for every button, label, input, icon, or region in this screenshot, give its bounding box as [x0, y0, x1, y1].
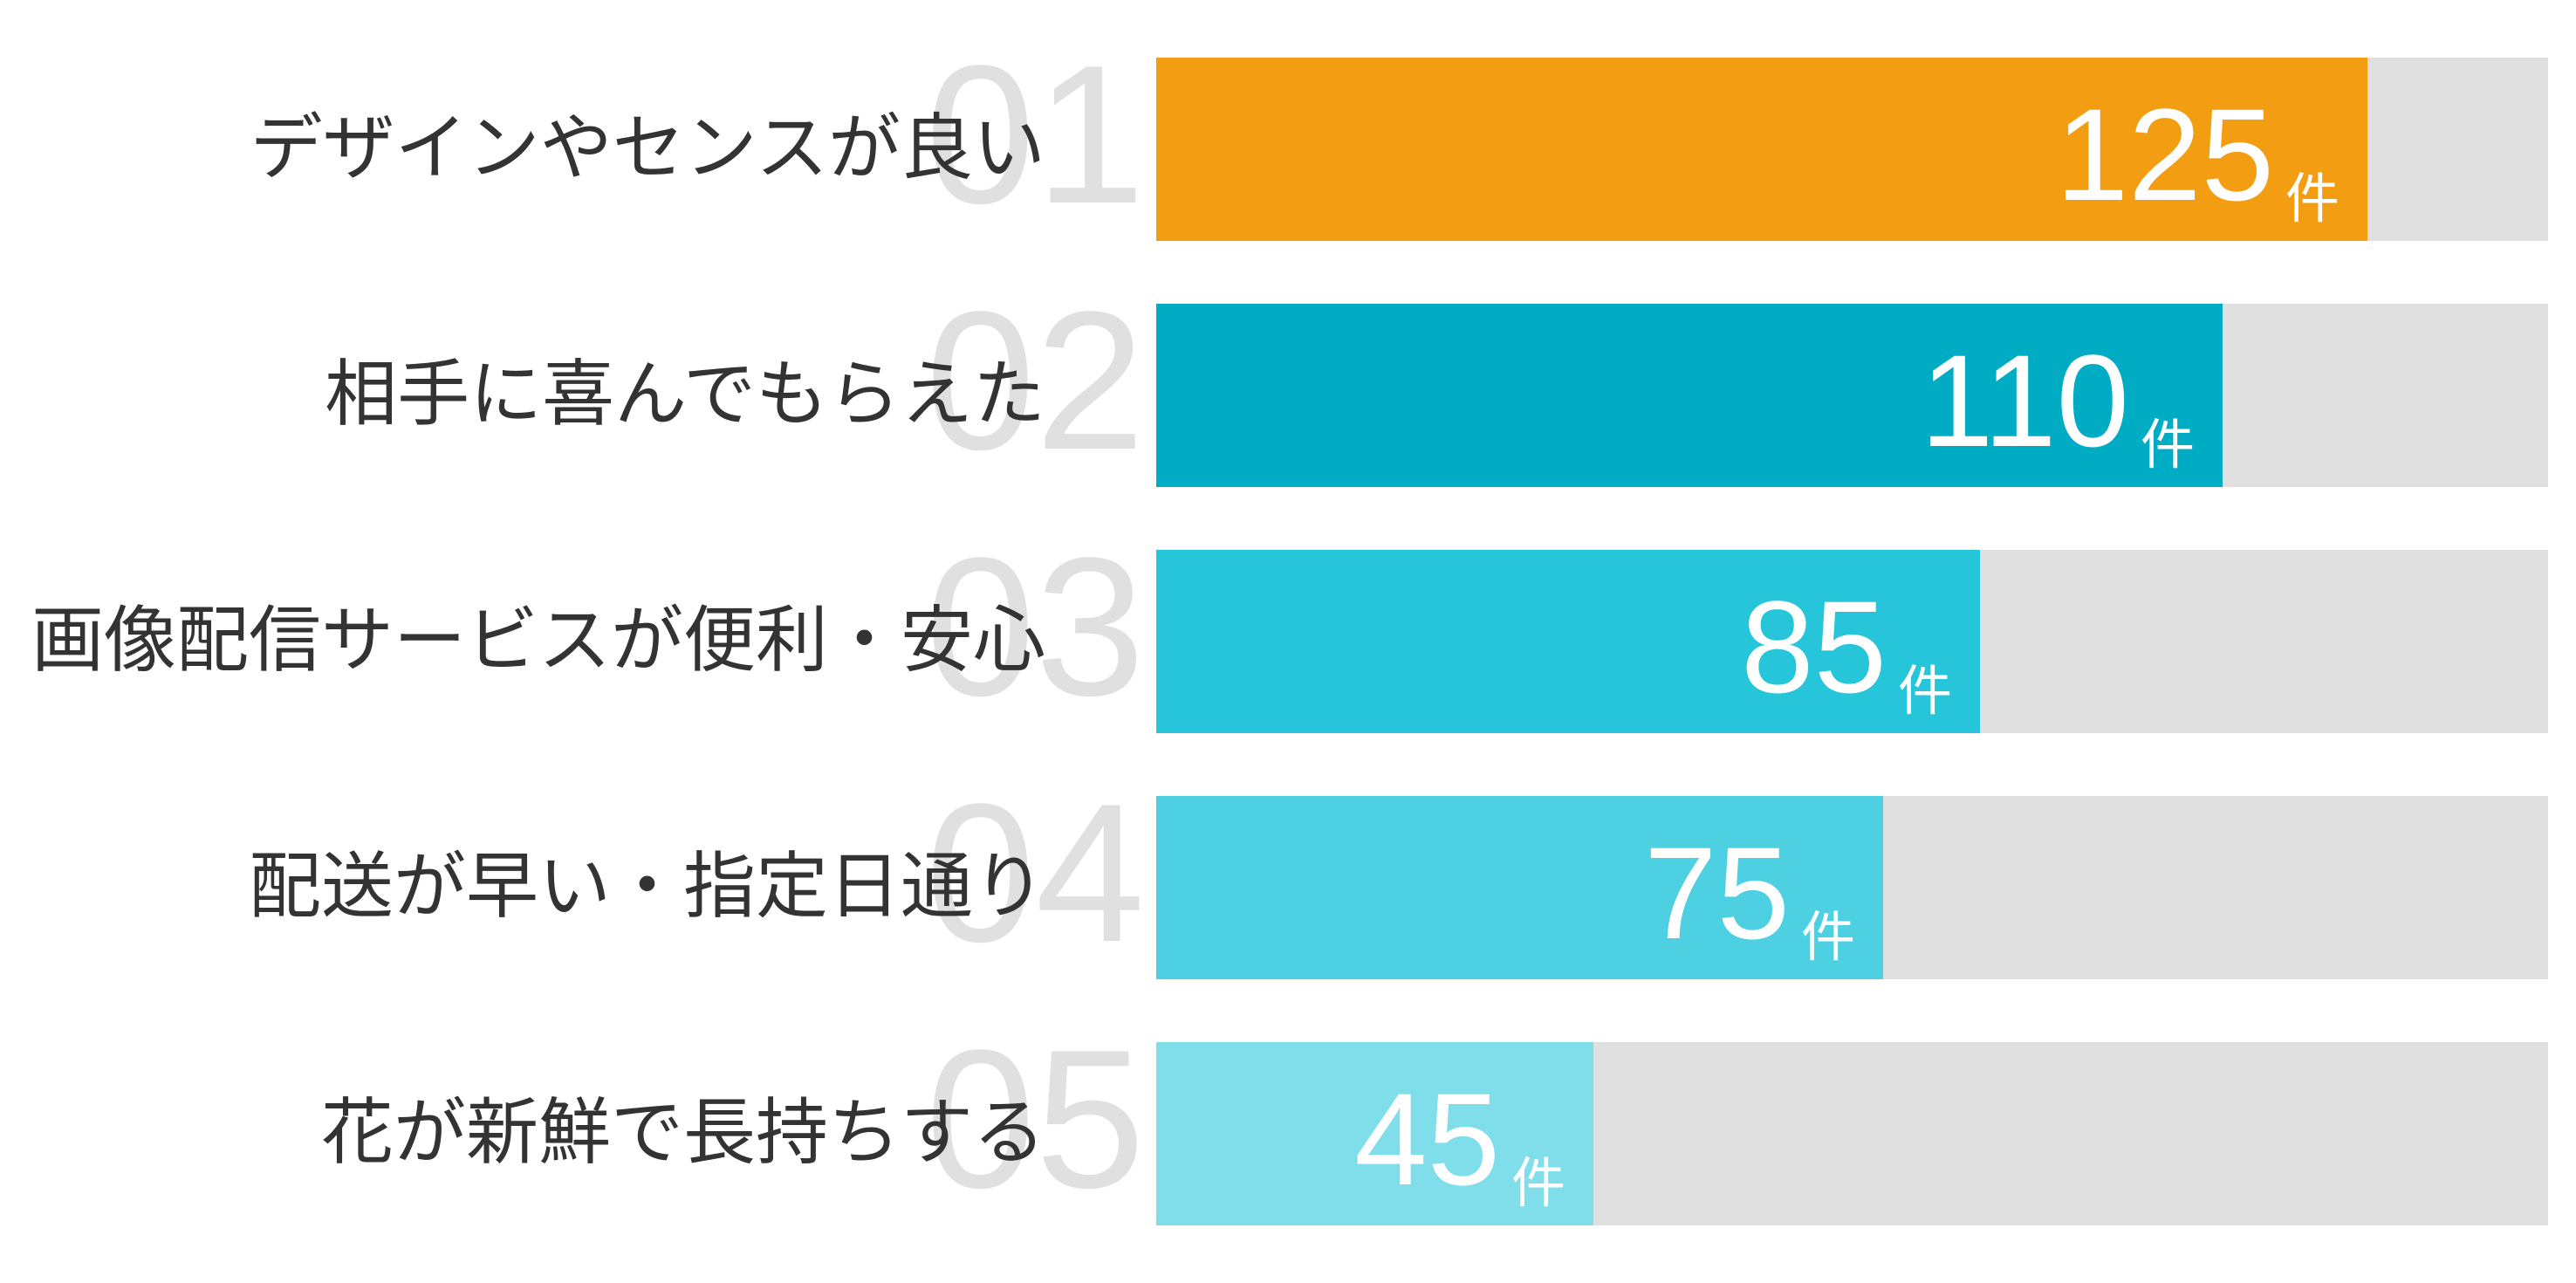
bar 4 [1156, 796, 1883, 979]
row 5 [321, 1008, 2548, 1229]
bar 2 [1156, 304, 2223, 487]
row 1 [250, 24, 2548, 244]
row 3 [31, 516, 2548, 737]
bar 2 background [1156, 304, 2548, 487]
row 4 [249, 762, 2548, 983]
value 5: 件 [1511, 1154, 1565, 1214]
label 5: 花が新鮮で長持ちする [321, 1092, 1045, 1173]
value 4: 75 [1644, 820, 1790, 966]
value 3 [1741, 573, 1952, 722]
bar 4 background [1156, 796, 2548, 979]
rank number 02: 02 [926, 270, 1145, 491]
row 2 [325, 270, 2548, 491]
bar 1 [1156, 58, 2367, 241]
label 2: 相手に喜んでもらえた [325, 353, 1045, 435]
bar 1 background [1156, 58, 2548, 241]
bar 3 background [1156, 550, 2548, 733]
rank number 04: 04 [926, 762, 1145, 983]
bar 5 [1156, 1042, 1593, 1225]
value 4: 件 [1801, 908, 1855, 968]
value 1: 125 [2056, 81, 2274, 228]
rank number 03: 03 [926, 516, 1145, 737]
bar 3 [1156, 550, 1980, 733]
value 3: 件 [1898, 662, 1952, 722]
value 1: 件 [2285, 169, 2340, 230]
value 5: 45 [1354, 1066, 1500, 1212]
label 4: 配送が早い・指定日通り [249, 846, 1045, 927]
bar 5 background [1156, 1042, 2548, 1225]
value 2: 件 [2141, 415, 2195, 476]
value 2: 110 [1921, 327, 2129, 474]
value 3: 85 [1741, 573, 1887, 720]
rank number 05: 05 [926, 1008, 1145, 1229]
rank number 01: 01 [926, 24, 1145, 244]
label 3: 画像配信サービスが便利・安心 [31, 600, 1045, 681]
label 1: デザインやセンスが良い [250, 107, 1045, 189]
value 5 [1354, 1066, 1565, 1214]
value 4 [1644, 820, 1855, 968]
